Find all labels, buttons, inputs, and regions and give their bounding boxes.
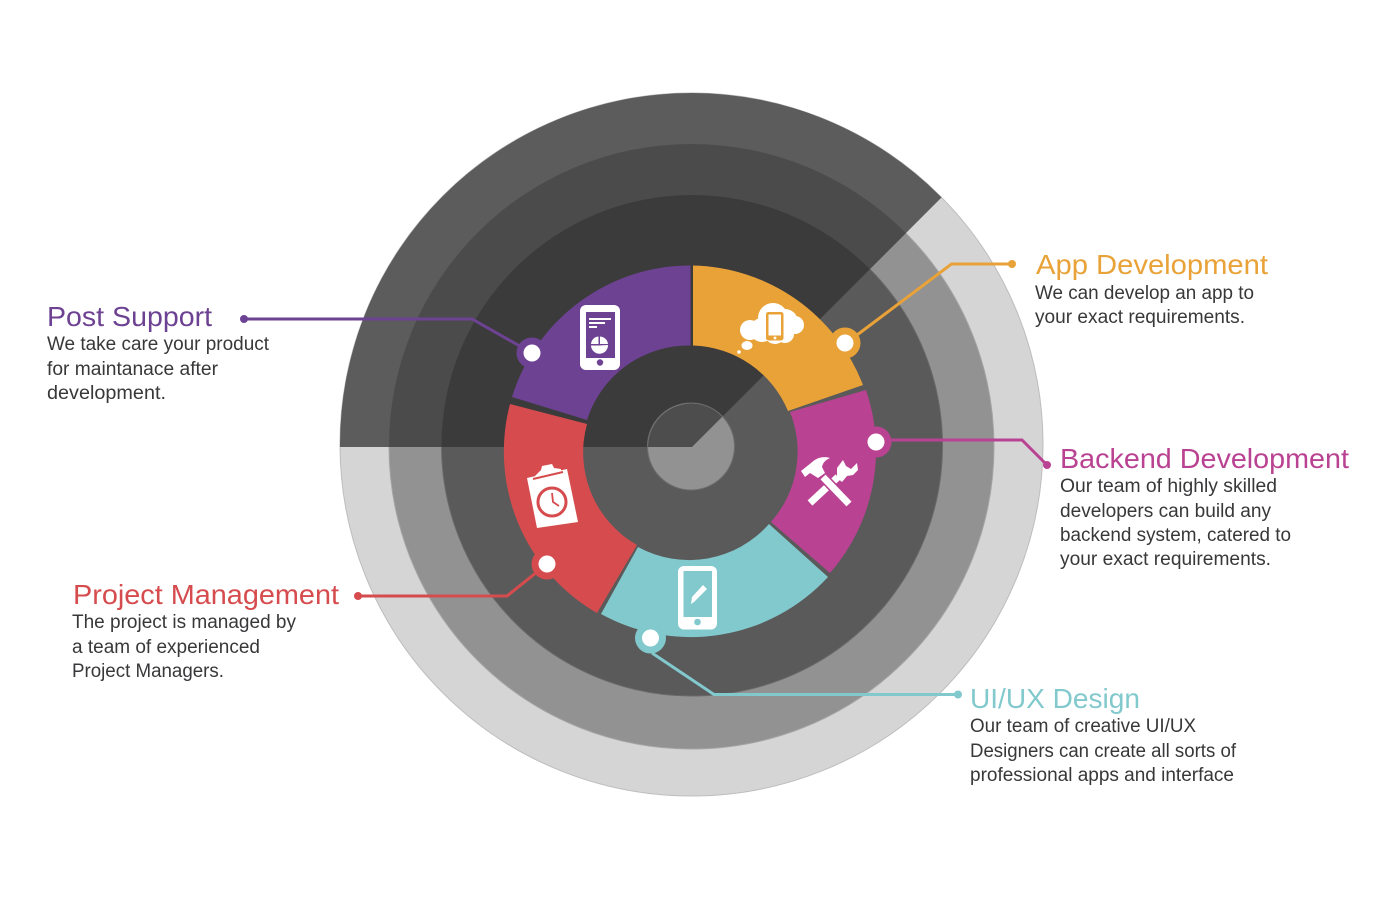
- text: UI/UX Design: Our team of creative UI/UX: [970, 716, 1196, 737]
- leader: Backend Development: [860, 426, 1051, 469]
- text: Post Support: Post Support: [47, 301, 212, 332]
- text: Backend Development: Backend Development: [1060, 443, 1349, 474]
- concentric background circles: [340, 93, 1043, 796]
- text: App Development: your exact requirements.: [1035, 307, 1245, 328]
- text: App Development: We can develop an app to: [1035, 283, 1254, 304]
- text: Backend Development: developers can build any: [1060, 501, 1271, 522]
- segment: Post Support: [512, 265, 690, 420]
- text: App Development: App Development: [1036, 249, 1268, 280]
- segment: UI/UX Design: [601, 524, 828, 637]
- icon: phone in thought cloud: [737, 303, 804, 354]
- leader: UI/UX Design: [635, 622, 962, 698]
- text: Project Management: a team of experienced: [72, 637, 260, 658]
- segment: App Development: [693, 266, 863, 411]
- text: Post Support: development.: [47, 383, 166, 404]
- icon: clipboard with clock: [527, 464, 578, 528]
- text: Post Support: [47, 301, 270, 404]
- leader: App Development: [830, 260, 1016, 358]
- text: UI/UX Design: UI/UX Design: [970, 683, 1140, 714]
- text: Post Support: We take care your product: [47, 334, 270, 355]
- text: UI/UX Design: professional apps and interface: [970, 765, 1234, 786]
- text: Backend Development: your exact requirements.: [1060, 549, 1271, 570]
- text: UI/UX Design: [970, 683, 1237, 786]
- center hub: [648, 403, 734, 490]
- icon: phone with pencil: [678, 566, 717, 630]
- text: App Development: [1035, 249, 1268, 328]
- segment: Backend Development: [771, 390, 876, 573]
- text: Backend Development: [1060, 443, 1349, 570]
- text: Project Management: Project Managers.: [72, 661, 224, 682]
- text: Backend Development: backend system, catered to: [1060, 525, 1291, 546]
- leader: Post Support: [240, 315, 548, 368]
- text: Project Management: [72, 579, 339, 682]
- text: Backend Development: Our team of highly skilled: [1060, 476, 1277, 497]
- icon: phone with chart: [580, 305, 620, 370]
- leader: Project Management: [354, 548, 562, 600]
- text: Project Management: The project is managed by: [72, 612, 296, 633]
- text: Post Support: for maintanace after: [47, 359, 219, 380]
- segment: Project Management: [504, 404, 637, 613]
- text: UI/UX Design: Designers can create all sorts of: [970, 741, 1237, 762]
- icon: hammer and wrench: [801, 457, 858, 504]
- text: Project Management: Project Management: [73, 579, 339, 610]
